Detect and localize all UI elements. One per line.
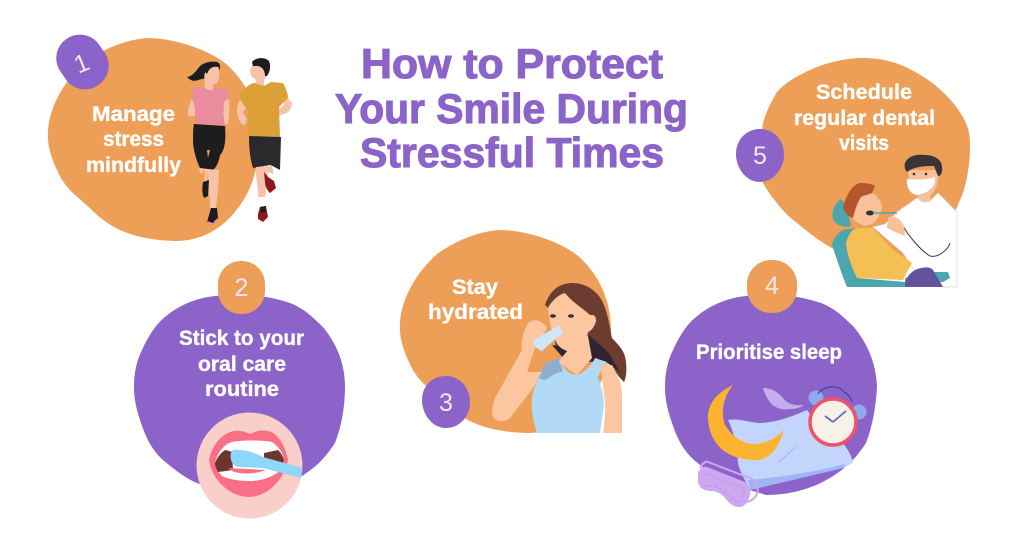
panel: 4 sleep	[665, 260, 877, 507]
title: How to Protect	[361, 40, 663, 87]
heading 1: stress	[103, 128, 164, 151]
badge 2: 2	[235, 274, 248, 302]
heading 3	[428, 276, 523, 324]
illustration: pillow	[728, 410, 853, 490]
panel: 2 oral care	[134, 261, 345, 518]
heading 2	[179, 327, 304, 401]
illustration: feather	[763, 388, 803, 409]
title	[335, 40, 688, 176]
blob 1	[48, 38, 259, 241]
heading 5: visits	[839, 132, 889, 155]
blob 3	[400, 230, 611, 433]
heading 5	[794, 81, 935, 155]
blob 2	[134, 295, 345, 490]
badge 4	[747, 260, 797, 313]
illustration: mouth and toothbrush	[196, 412, 302, 518]
heading 5: regular dental	[794, 107, 935, 130]
heading 1	[86, 103, 181, 177]
badge 2	[218, 261, 265, 314]
heading 1: mindfully	[86, 154, 181, 177]
heading 3: hydrated	[428, 301, 523, 324]
badge 3	[422, 376, 470, 428]
blob 5	[760, 58, 970, 262]
heading 2: routine	[205, 378, 279, 401]
title: Your Smile During	[335, 85, 688, 132]
title: Stressful Times	[360, 129, 664, 176]
heading 1: Manage	[92, 103, 175, 126]
badge 1: 1	[70, 48, 93, 79]
heading 4: Prioritise sleep	[696, 341, 842, 364]
badge 1	[47, 26, 118, 98]
badge 5	[736, 129, 784, 182]
illustration: woman jogging	[187, 62, 229, 225]
badge 5: 5	[753, 142, 767, 170]
illustration: man jogging	[237, 58, 292, 222]
illustration: alarm clock	[808, 387, 866, 445]
illustration: dentist	[873, 155, 957, 287]
badge 4: 4	[765, 272, 779, 300]
heading 5: Schedule	[816, 81, 912, 104]
badge 3: 3	[439, 389, 453, 417]
blob 4	[665, 295, 877, 495]
panel: 1 manage stress	[47, 26, 292, 241]
heading 3: Stay	[452, 276, 498, 299]
illustration: crescent moon	[708, 385, 784, 460]
heading 2: Stick to your	[179, 327, 304, 350]
illustration: woman drinking water	[492, 283, 626, 433]
heading 2: oral care	[198, 353, 286, 376]
panel: 3 hydration	[400, 230, 626, 433]
illustration: patient in chair	[832, 183, 950, 287]
panel: 5 dental visits	[736, 58, 970, 287]
illustration: sleep mask	[698, 462, 758, 507]
